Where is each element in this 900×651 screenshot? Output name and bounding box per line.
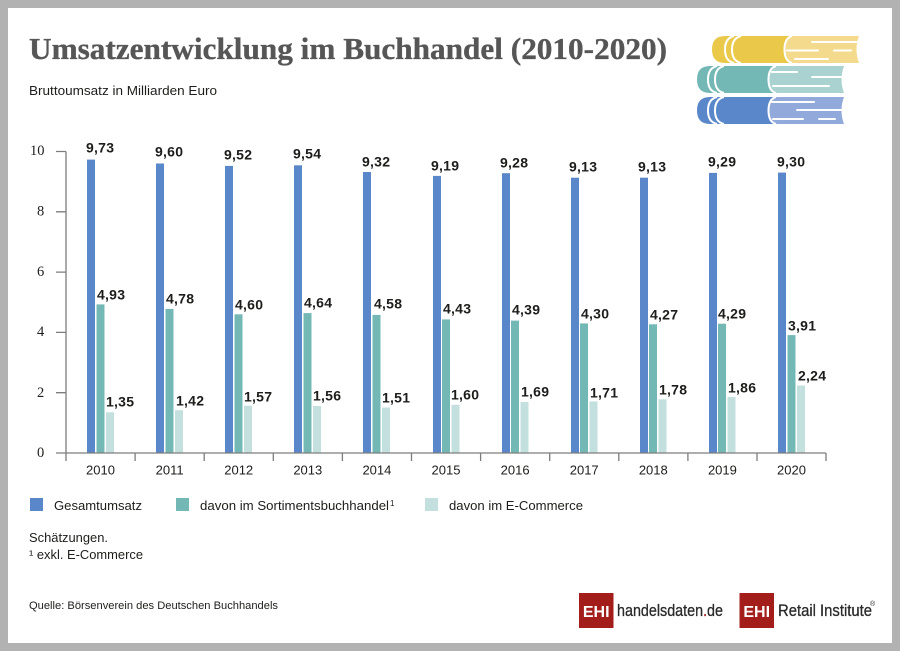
logo: EHI Retail Institute: Retail Institute — [778, 602, 872, 620]
y axis labels — [30, 143, 45, 461]
x axis years: 2010 — [86, 462, 115, 478]
value labels: Gesamtumsatz: 9,28 — [500, 154, 528, 170]
x axis years: 2019 — [708, 462, 737, 478]
logo: EHI Retail Institute: ® — [870, 600, 876, 608]
value labels: Gesamtumsatz — [86, 140, 805, 174]
value labels: Sortimentsbuchhandel: 4,29 — [718, 306, 746, 322]
value labels: E-Commerce — [106, 368, 826, 410]
x axis years: 2020 — [777, 462, 806, 478]
value labels: Sortimentsbuchhandel: 3,91 — [788, 318, 816, 334]
x axis years: 2017 — [570, 462, 599, 478]
icon: blue book — [697, 97, 844, 124]
y axis labels: 2 — [37, 385, 44, 401]
value labels: Gesamtumsatz: 9,54 — [293, 146, 321, 162]
subtitle: Bruttoumsatz in Milliarden Euro — [29, 84, 217, 98]
value labels: E-Commerce: 1,35 — [106, 394, 134, 410]
value labels: Sortimentsbuchhandel: 4,30 — [581, 306, 609, 322]
value labels: E-Commerce: 1,56 — [313, 388, 341, 404]
x axis years: 2011 — [156, 462, 184, 478]
value labels: Gesamtumsatz: 9,60 — [155, 144, 183, 160]
value labels: Sortimentsbuchhandel: 4,27 — [650, 306, 678, 322]
value labels: Gesamtumsatz: 9,32 — [362, 154, 390, 170]
value labels: Sortimentsbuchhandel: 4,39 — [512, 302, 540, 318]
value labels: E-Commerce: 1,69 — [521, 384, 549, 400]
y axis labels: 6 — [37, 264, 44, 280]
icon: teal book — [697, 66, 844, 93]
y axis labels: 8 — [37, 204, 44, 220]
bars: Gesamtumsatz — [87, 160, 786, 453]
source: Quelle: Börsenverein des Deutschen Buchhandels — [29, 600, 278, 612]
x axis years: 2018 — [639, 462, 668, 478]
y axis labels: 4 — [37, 324, 45, 340]
logo: EHI Retail Institute — [740, 593, 876, 628]
value labels: Sortimentsbuchhandel: 4,58 — [374, 296, 402, 312]
logo: EHI handelsdaten.de: handelsdaten.de — [617, 602, 723, 620]
value labels: E-Commerce: 1,71 — [590, 384, 618, 400]
legend item: Sortimentsbuchhandel: davon im Sortimentsbuchhandel — [200, 499, 389, 513]
x axis years: 2016 — [501, 462, 530, 478]
icon: stack of books — [697, 36, 859, 124]
logo: EHI handelsdaten.de: EHI — [583, 604, 610, 621]
value labels: Gesamtumsatz: 9,19 — [431, 158, 459, 174]
value labels: Sortimentsbuchhandel: 4,64 — [304, 294, 332, 310]
chart axes — [56, 152, 826, 461]
value labels: Gesamtumsatz: 9,30 — [777, 154, 805, 170]
footnotes: Schätzungen. — [29, 531, 108, 545]
footnotes — [29, 531, 143, 562]
value labels: Gesamtumsatz: 9,73 — [86, 140, 114, 156]
footnotes: ¹ exkl. E-Commerce — [29, 548, 143, 562]
y axis labels: 10 — [30, 143, 44, 159]
value labels: E-Commerce: 1,78 — [659, 382, 687, 398]
value labels: Gesamtumsatz: 9,52 — [224, 146, 252, 162]
icon: yellow book — [712, 36, 859, 63]
value labels: E-Commerce: 1,60 — [451, 386, 479, 402]
bars: E-Commerce — [106, 386, 805, 453]
x axis years — [86, 462, 806, 478]
value labels: Sortimentsbuchhandel: 4,93 — [97, 286, 125, 302]
legend item: Gesamtumsatz: Gesamtumsatz — [54, 499, 142, 513]
title: Umsatzentwicklung im Buchhandel (2010-2020) — [29, 31, 667, 66]
value labels: E-Commerce: 2,24 — [798, 368, 826, 384]
value labels: E-Commerce: 1,86 — [728, 380, 756, 396]
legend item: E-Commerce: davon im E-Commerce — [449, 499, 583, 513]
value labels: E-Commerce: 1,42 — [176, 392, 204, 408]
value labels: E-Commerce: 1,57 — [244, 388, 272, 404]
value labels: Sortimentsbuchhandel: 4,60 — [235, 296, 263, 312]
legend item: Sortimentsbuchhandel: 1 — [390, 499, 395, 508]
x axis years: 2014 — [362, 462, 391, 478]
value labels: Gesamtumsatz: 9,29 — [708, 154, 736, 170]
logo: EHI Retail Institute: EHI — [743, 604, 770, 621]
legend — [30, 498, 583, 513]
value labels: Gesamtumsatz: 9,13 — [569, 158, 597, 174]
x axis years: 2015 — [432, 462, 460, 478]
value labels: Sortimentsbuchhandel: 4,78 — [166, 290, 194, 306]
y axis labels: 0 — [37, 445, 44, 461]
value labels: Gesamtumsatz: 9,13 — [638, 158, 666, 174]
value labels: Sortimentsbuchhandel: 4,43 — [443, 300, 471, 316]
logo: EHI handelsdaten.de — [579, 593, 723, 628]
value labels: Sortimentsbuchhandel — [97, 286, 816, 334]
x axis years: 2012 — [224, 462, 253, 478]
x axis years: 2013 — [293, 462, 322, 478]
bars: Sortimentsbuchhandel — [96, 304, 796, 453]
value labels: E-Commerce: 1,51 — [382, 390, 410, 406]
